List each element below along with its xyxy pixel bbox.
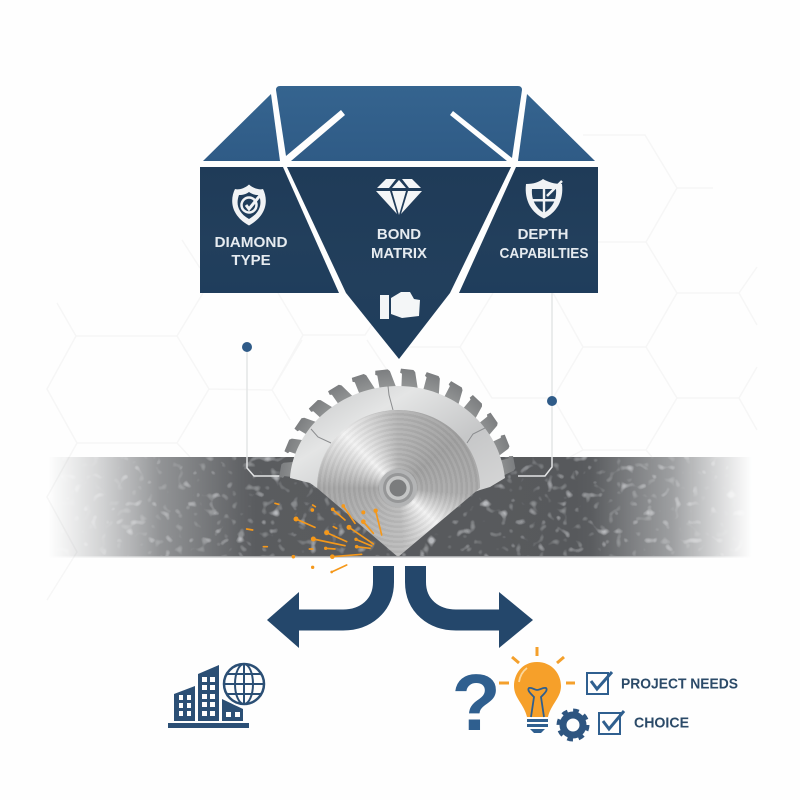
saw blade bbox=[279, 369, 517, 565]
top left facet bbox=[203, 94, 280, 161]
icon: shield with cross bbox=[526, 179, 562, 218]
concrete slab band bbox=[58, 457, 744, 558]
panel: bond matrix bbox=[287, 167, 511, 359]
checkbox: choice bbox=[599, 711, 624, 734]
label: type: TYPE bbox=[231, 252, 271, 269]
top right facet bbox=[518, 94, 595, 161]
left connector line and dot bbox=[242, 342, 280, 476]
checkbox: project needs bbox=[587, 672, 612, 694]
label: depth: DEPTH bbox=[518, 226, 568, 243]
top center facet bbox=[276, 86, 522, 161]
arrow: left bbox=[267, 566, 384, 648]
label: matrix: MATRIX bbox=[371, 245, 427, 262]
icon: diamond bbox=[376, 179, 422, 215]
icon: gear bbox=[559, 711, 587, 739]
background hexagon pattern bbox=[47, 135, 757, 600]
steel disc bbox=[317, 410, 480, 556]
panel: depth capabilities bbox=[459, 167, 598, 293]
icon: city buildings and globe bbox=[168, 661, 267, 728]
label: diamond type: DIAMOND bbox=[214, 234, 288, 251]
saw teeth bbox=[279, 369, 517, 481]
hub bbox=[379, 469, 417, 507]
diamond graphic bbox=[200, 86, 598, 359]
icon: lightbulb bbox=[499, 647, 575, 733]
right connector line and dot bbox=[518, 293, 557, 476]
ring cracks bbox=[311, 386, 485, 443]
outer steel ring bbox=[290, 386, 505, 520]
label: capabilties: CAPABILTIES bbox=[500, 245, 588, 262]
sparks bbox=[247, 503, 382, 573]
icon: shield with check bbox=[232, 184, 266, 226]
arrow: right bbox=[416, 566, 533, 648]
label: bond: BOND bbox=[377, 226, 421, 243]
icon: fist bbox=[380, 292, 420, 319]
panel: diamond type bbox=[200, 167, 339, 293]
icon: question mark: ? bbox=[452, 658, 500, 747]
label: project needs: PROJECT NEEDS bbox=[621, 676, 738, 692]
label: choice: CHOICE bbox=[634, 714, 689, 732]
